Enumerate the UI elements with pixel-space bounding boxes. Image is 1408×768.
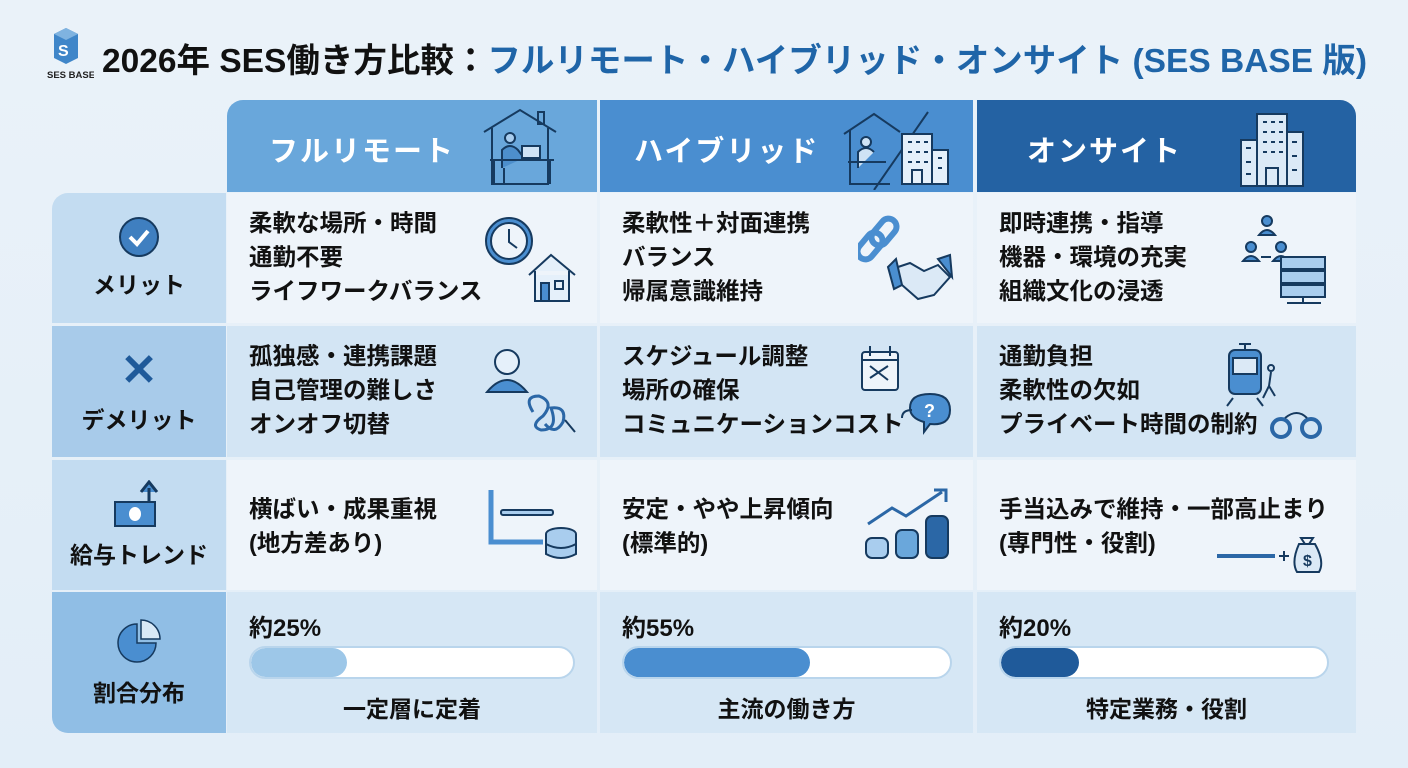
cell: remote share: 一定層に定着	[343, 696, 481, 722]
row label: デメリット: デメリット	[82, 406, 196, 432]
cell: hybrid share: 主流の働き方	[718, 696, 856, 722]
cell: hybrid merit: バランス	[622, 244, 716, 270]
cell: hybrid demerit	[600, 326, 973, 457]
icon: rising chart with coins	[865, 488, 949, 559]
cell: remote demerit: 孤独感・連携課題	[249, 343, 437, 369]
cell: onsite merit: 即時連携・指導	[999, 210, 1164, 236]
icon: calendar and speech bubble: ?	[924, 401, 935, 421]
header: フルリモート: フルリモート	[269, 136, 455, 168]
cell: hybrid demerit: 場所の確保	[622, 377, 740, 403]
icon: line plus money bag	[1217, 537, 1322, 573]
cell: remote salary: (地方差あり)	[249, 530, 382, 556]
cell: hybrid share: 約55%	[622, 615, 694, 642]
row label: デメリット	[52, 326, 226, 457]
cell: onsite demerit	[977, 326, 1356, 457]
cell: onsite demerit: 柔軟性の欠如	[999, 377, 1140, 403]
icon: team and server	[1241, 215, 1326, 304]
progress bar 20%	[999, 646, 1329, 679]
cell: hybrid share	[600, 592, 973, 733]
row label: デメリット: ✕	[121, 346, 157, 394]
row label: 給与トレンド: 給与トレンド	[70, 542, 208, 568]
cell: onsite salary: 手当込みで維持・一部高止まり	[999, 496, 1328, 522]
cell: hybrid demerit: スケジュール調整	[622, 343, 808, 369]
icon: remote worker	[484, 109, 556, 185]
cell: onsite share	[977, 592, 1356, 733]
title: 2026年 SES働き方比較：フルリモート・ハイブリッド・オンサイト (SES BASE 版)	[102, 43, 1367, 80]
header: オンサイト	[977, 100, 1356, 192]
cell: onsite merit	[977, 193, 1356, 323]
cell: remote share: 約25%	[249, 615, 321, 642]
cell: hybrid salary: (標準的)	[622, 530, 708, 556]
cell: onsite demerit: 通勤負担	[999, 343, 1093, 369]
icon: clock and house	[485, 217, 576, 302]
cell: hybrid merit: 帰属意識維持	[622, 278, 763, 304]
cell: remote merit	[227, 193, 597, 323]
cell: onsite salary: (専門性・役割)	[999, 530, 1156, 556]
cell: remote merit: ライフワークバランス	[249, 278, 482, 304]
header: フルリモート	[227, 100, 597, 192]
cell: hybrid salary: 安定・やや上昇傾向	[622, 496, 834, 522]
icon: hybrid	[844, 112, 949, 190]
cell: onsite salary	[977, 460, 1356, 590]
header: ハイブリッド	[600, 100, 973, 192]
cell: remote demerit: オンオフ切替	[249, 411, 390, 437]
cell: remote merit: 柔軟な場所・時間	[249, 210, 437, 236]
cell: onsite share: 約20%	[999, 615, 1071, 642]
icon: chain and handshake	[858, 216, 954, 300]
progress bar 55%	[622, 646, 952, 679]
cell: onsite demerit: プライベート時間の制約	[999, 411, 1258, 437]
logo: SES BASE	[47, 70, 94, 81]
cell: hybrid merit: 柔軟性＋対面連携	[622, 210, 810, 236]
icon: train and handcuffs	[1226, 343, 1322, 439]
row label: 給与トレンド	[52, 460, 226, 590]
cell: hybrid demerit: コミュニケーションコスト	[622, 411, 904, 437]
row label: 割合分布	[52, 592, 226, 733]
cell: remote merit: 通勤不要	[249, 244, 343, 270]
cell: remote share	[227, 592, 597, 733]
progress bar 25%	[249, 646, 575, 679]
cell: remote salary	[227, 460, 597, 590]
row label: 割合分布: 割合分布	[93, 680, 185, 706]
cell: remote salary: 横ばい・成果重視	[249, 496, 437, 522]
icon: person and tangled cable	[485, 349, 576, 433]
row label: メリット: メリット	[93, 272, 185, 298]
icon: calendar and speech bubble	[861, 346, 951, 435]
icon: office building	[1240, 113, 1304, 187]
cell: remote demerit: 自己管理の難しさ	[249, 377, 437, 403]
cell: hybrid merit	[600, 193, 973, 323]
cell: onsite merit: 機器・環境の充実	[999, 244, 1187, 270]
cell: onsite share: 特定業務・役割	[1086, 696, 1247, 722]
logo: S	[58, 43, 69, 60]
logo	[47, 28, 94, 81]
cell: hybrid salary	[600, 460, 973, 590]
cell: onsite merit: 組織文化の浸透	[999, 278, 1164, 304]
header: ハイブリッド: ハイブリッド	[634, 136, 819, 168]
row label: メリット	[52, 193, 226, 323]
icon: flat chart	[488, 490, 577, 559]
cell: remote demerit	[227, 326, 597, 457]
icon: line plus money bag: $	[1303, 553, 1312, 570]
header: オンサイト: オンサイト	[1027, 136, 1182, 168]
